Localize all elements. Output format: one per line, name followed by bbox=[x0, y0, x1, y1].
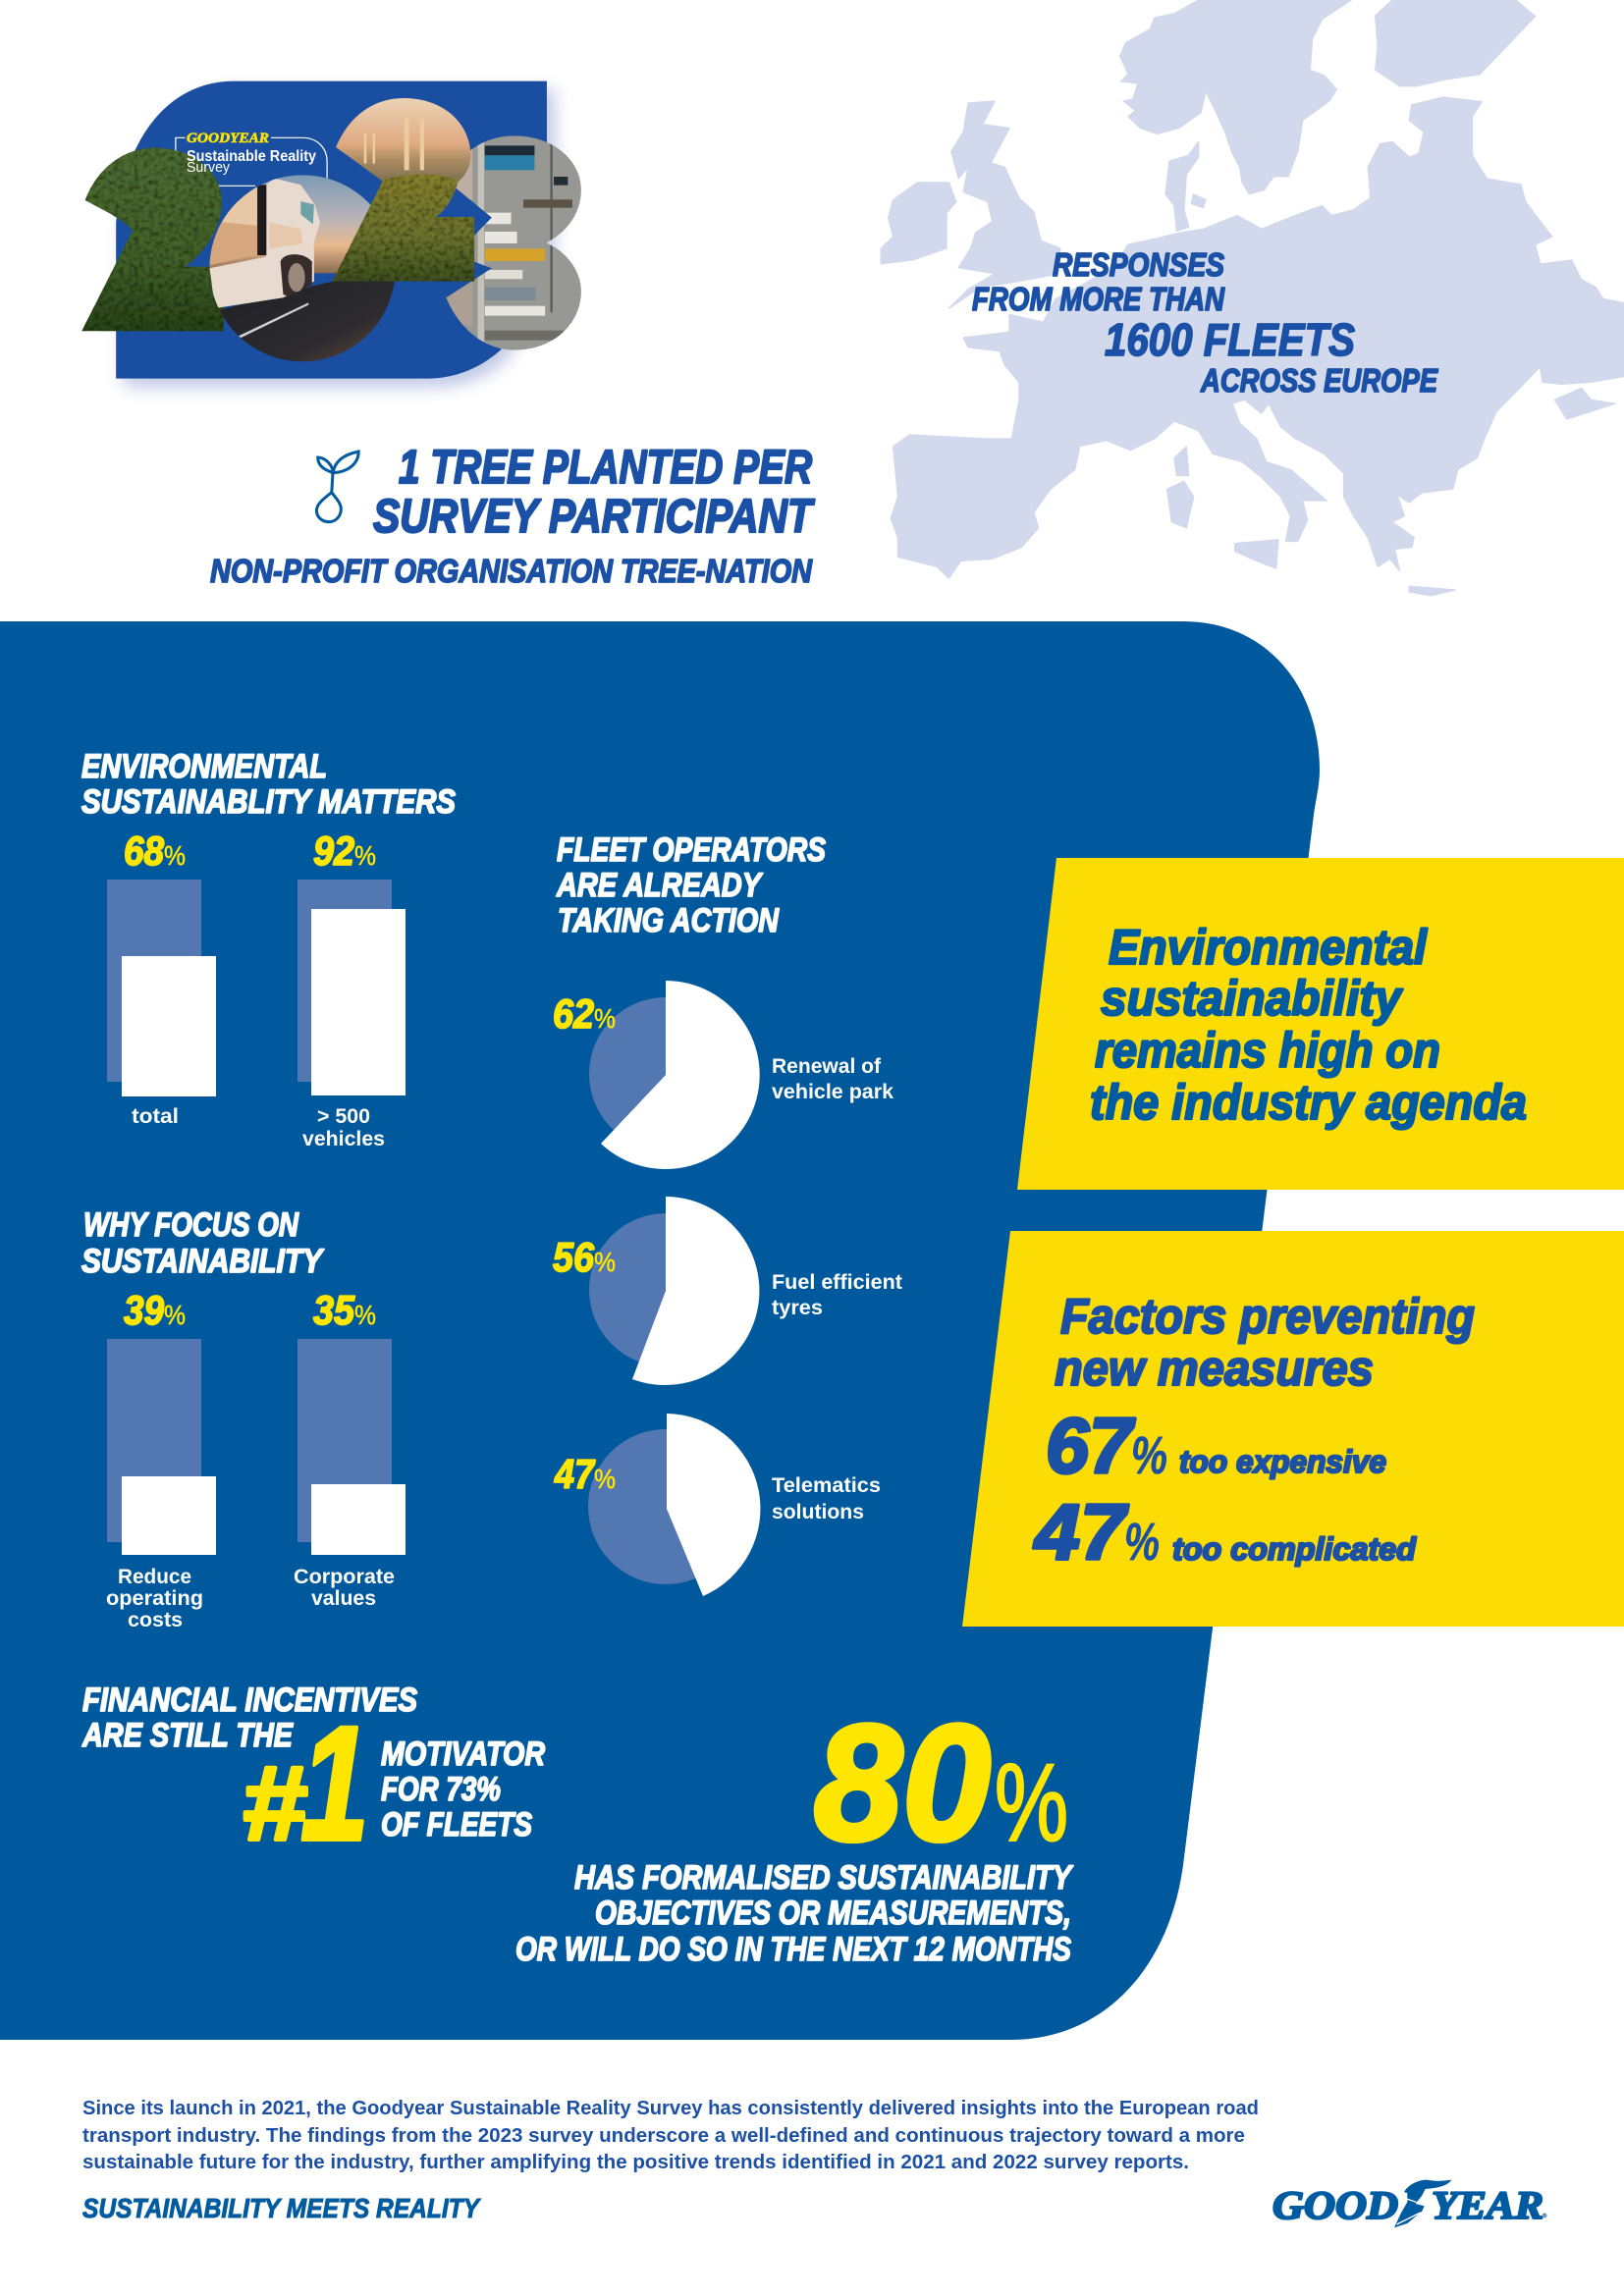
panel: yellow callout, high on agenda: remains high on bbox=[1095, 1023, 1440, 1078]
heading: why focus on sustainability bbox=[81, 1206, 325, 1280]
bar chart: environmental sustainability matters: 68 bbox=[124, 828, 165, 874]
heading: fleet operators are already taking action bbox=[556, 831, 826, 939]
callout: 80 percent bbox=[515, 1690, 1074, 1968]
footer paragraph: sustainable future for the industry, further amplifying the positive trends identified in 2021 and 2022 survey reports. bbox=[82, 2152, 1189, 2173]
panel: yellow callout, high on agenda bbox=[1017, 858, 1624, 1190]
Goodyear logo: YEAR bbox=[1432, 2183, 1543, 2227]
pie chart: fuel efficient tyres: Fuel efficient bbox=[772, 1271, 902, 1294]
bar chart: why focus on sustainability bbox=[106, 1287, 406, 1631]
icon: sprout bbox=[316, 452, 358, 522]
hero blue backing shape bbox=[116, 81, 547, 379]
callout: 80 percent: % bbox=[995, 1741, 1068, 1864]
bar chart: environmental sustainability matters: % bbox=[164, 840, 186, 871]
callout: financial incentives: ARE STILL THE bbox=[81, 1717, 294, 1754]
bar chart: why focus on sustainability: % bbox=[164, 1300, 186, 1330]
pie chart: telematics solutions: 47 bbox=[554, 1451, 595, 1497]
tree planting headline bbox=[210, 442, 815, 589]
footer paragraph bbox=[82, 2098, 1259, 2173]
pie chart: renewal of vehicle park: Renewal of bbox=[772, 1055, 882, 1078]
heading: why focus on sustainability: WHY FOCUS ON bbox=[83, 1206, 299, 1244]
bar chart: environmental sustainability matters: 92 bbox=[313, 828, 354, 874]
panel: yellow callout, high on agenda: sustainability bbox=[1101, 971, 1403, 1026]
pie chart: fuel efficient tyres: % bbox=[594, 1247, 616, 1277]
icon: winged foot bbox=[1394, 2180, 1451, 2227]
heading: why focus on sustainability: SUSTAINABILITY bbox=[81, 1243, 325, 1280]
callout: financial incentives bbox=[81, 1682, 545, 1875]
pie chart: telematics solutions: % bbox=[594, 1464, 616, 1494]
panel: yellow callout, factors preventing new measures: 67 bbox=[1046, 1402, 1135, 1489]
footer paragraph: transport industry. The findings from the 2023 survey underscore a well-defined and continuous trajectory toward a more bbox=[82, 2125, 1245, 2147]
tagline: SUSTAINABILITY MEETS REALITY bbox=[82, 2193, 481, 2223]
pie chart: renewal of vehicle park: 62 bbox=[553, 990, 594, 1037]
map headline: responses from more than 1600 fleets: RESPONSES bbox=[1053, 246, 1224, 283]
heading: fleet operators are already taking action: FLEET OPERATORS bbox=[557, 831, 826, 869]
pie chart: renewal of vehicle park bbox=[553, 981, 893, 1169]
survey badge text bbox=[187, 131, 316, 176]
panel: yellow callout, factors preventing new measures: new measures bbox=[1055, 1341, 1374, 1396]
pie chart: fuel efficient tyres bbox=[553, 1197, 902, 1385]
pie chart: telematics solutions: Telematics bbox=[772, 1474, 881, 1497]
digit 0: truck on road bbox=[210, 175, 396, 361]
tree planting headline: NON-PROFIT ORGANISATION TREE-NATION bbox=[210, 553, 813, 589]
bar chart: environmental sustainability matters: total bbox=[132, 1105, 179, 1128]
panel: yellow callout, factors preventing new measures bbox=[962, 1231, 1624, 1627]
digit 3: warehouse from above bbox=[445, 134, 583, 351]
callout: financial incentives: 1 bbox=[300, 1693, 369, 1875]
callout: 80 percent: HAS FORMALISED SUSTAINABILITY bbox=[574, 1859, 1074, 1896]
heading: environmental sustainability matters: SUSTAINABLITY MATTERS bbox=[81, 783, 456, 821]
hero: 2023 survey graphic bbox=[81, 81, 583, 379]
panel: survey results bbox=[0, 621, 1320, 2040]
panel: yellow callout, high on agenda: the industry agenda bbox=[1090, 1075, 1527, 1130]
panel: yellow callout, factors preventing new measures: % bbox=[1124, 1513, 1160, 1572]
bar chart: why focus on sustainability: Corporate bbox=[294, 1566, 395, 1588]
digit 2: bridge and forest bbox=[332, 98, 474, 282]
heading: environmental sustainability matters bbox=[81, 748, 456, 821]
digit 2: forest bbox=[81, 148, 224, 331]
bar chart: why focus on sustainability: 39 bbox=[124, 1287, 165, 1333]
callout: financial incentives: # bbox=[242, 1743, 306, 1862]
heading: fleet operators are already taking action: TAKING ACTION bbox=[558, 902, 780, 939]
bar chart: why focus on sustainability: operating bbox=[106, 1587, 203, 1610]
map headline: responses from more than 1600 fleets: ACROSS EUROPE bbox=[1200, 362, 1438, 399]
bar chart: environmental sustainability matters: vehicles bbox=[302, 1128, 385, 1150]
bar chart: why focus on sustainability: values bbox=[311, 1587, 376, 1610]
bar chart: why focus on sustainability: % bbox=[354, 1300, 376, 1330]
panel: yellow callout, high on agenda: Environmental bbox=[1109, 920, 1428, 975]
pie chart: renewal of vehicle park: % bbox=[594, 1003, 616, 1034]
Goodyear logo bbox=[1272, 2180, 1547, 2227]
bar chart: environmental sustainability matters: > 500 bbox=[317, 1105, 370, 1128]
panel: yellow callout, factors preventing new measures: too complicated bbox=[1172, 1531, 1417, 1567]
map of Europe bbox=[881, 0, 1624, 596]
survey badge text: GOODYEAR bbox=[187, 131, 269, 146]
map headline: responses from more than 1600 fleets: FROM MORE THAN bbox=[972, 281, 1225, 317]
tree planting headline: 1 TREE PLANTED PER bbox=[399, 442, 812, 494]
panel: yellow callout, factors preventing new measures: too expensive bbox=[1179, 1444, 1386, 1479]
callout: financial incentives: OF FLEETS bbox=[381, 1806, 532, 1843]
survey badge outline bbox=[176, 137, 327, 186]
callout: financial incentives: FINANCIAL INCENTIVES bbox=[82, 1682, 417, 1719]
map headline: responses from more than 1600 fleets: 1600 FLEETS bbox=[1105, 314, 1355, 365]
panel: yellow callout, factors preventing new measures: % bbox=[1131, 1426, 1167, 1485]
survey badge text: Survey bbox=[187, 159, 230, 176]
bar chart: environmental sustainability matters bbox=[107, 828, 406, 1150]
bar chart: why focus on sustainability: 35 bbox=[313, 1287, 355, 1333]
survey badge text: Sustainable Reality bbox=[187, 148, 316, 165]
Goodyear logo: GOOD bbox=[1272, 2183, 1398, 2227]
footer paragraph: Since its launch in 2021, the Goodyear Sustainable Reality Survey has consistently delivered insights into the European road bbox=[82, 2098, 1259, 2119]
pie chart: telematics solutions bbox=[554, 1414, 881, 1596]
tree planting headline: SURVEY PARTICIPANT bbox=[373, 491, 815, 543]
bar chart: why focus on sustainability: costs bbox=[128, 1609, 183, 1631]
pie chart: telematics solutions: solutions bbox=[772, 1501, 864, 1523]
callout: 80 percent: OR WILL DO SO IN THE NEXT 12 MONTHS bbox=[515, 1931, 1071, 1968]
callout: 80 percent: OBJECTIVES OR MEASUREMENTS, bbox=[595, 1895, 1071, 1932]
panel: yellow callout, factors preventing new measures: 47 bbox=[1033, 1488, 1129, 1575]
panel: yellow callout, factors preventing new measures: Factors preventing bbox=[1060, 1289, 1475, 1344]
callout: 80 percent: 80 bbox=[814, 1690, 991, 1875]
heading: environmental sustainability matters: ENVIRONMENTAL bbox=[81, 748, 327, 785]
panel background bbox=[0, 621, 1320, 2040]
pie chart: fuel efficient tyres: 56 bbox=[553, 1234, 595, 1280]
map headline: responses from more than 1600 fleets bbox=[972, 246, 1438, 399]
bar chart: environmental sustainability matters: % bbox=[354, 840, 376, 871]
pie chart: fuel efficient tyres: tyres bbox=[772, 1297, 823, 1319]
pie chart: renewal of vehicle park: vehicle park bbox=[772, 1081, 893, 1103]
callout: financial incentives: FOR 73% bbox=[381, 1771, 501, 1808]
bar chart: why focus on sustainability: Reduce bbox=[118, 1566, 191, 1588]
callout: financial incentives: MOTIVATOR bbox=[381, 1735, 545, 1773]
heading: fleet operators are already taking action: ARE ALREADY bbox=[556, 867, 764, 904]
